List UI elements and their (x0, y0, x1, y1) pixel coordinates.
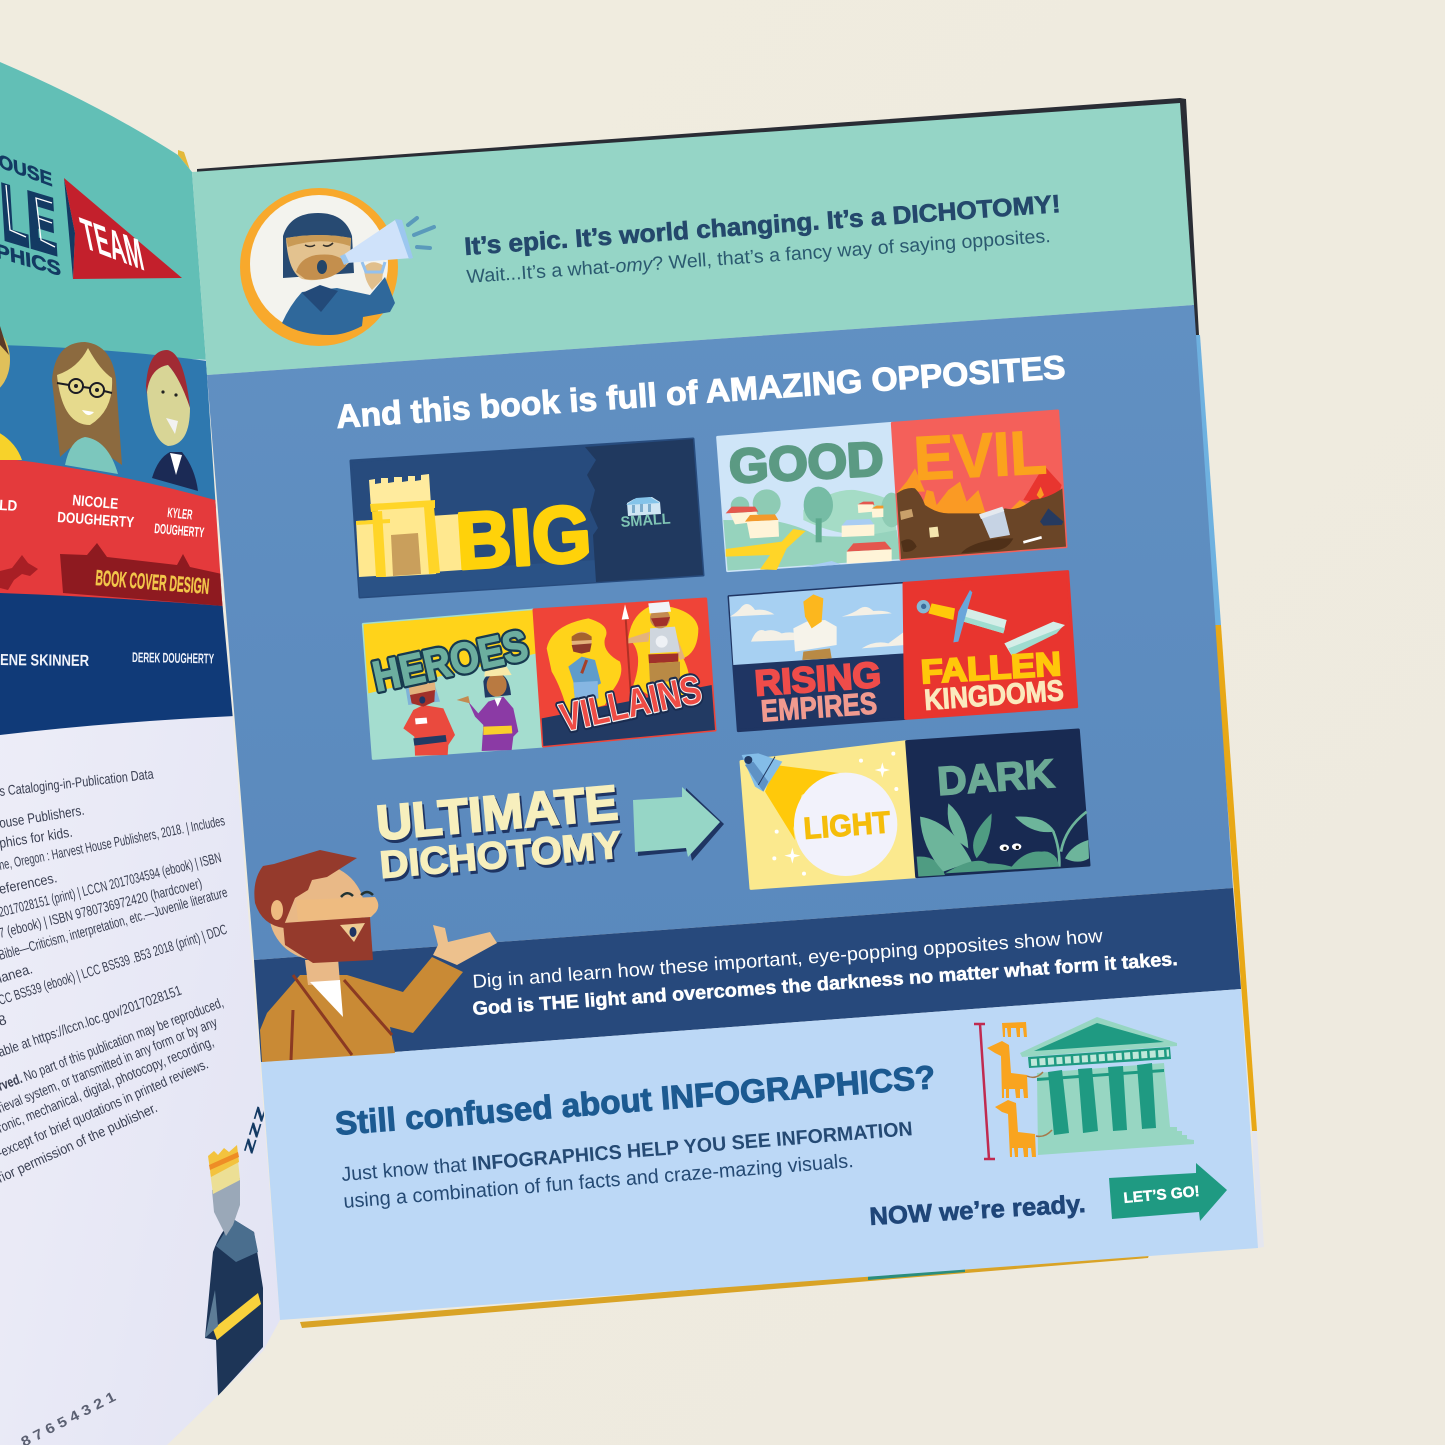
card: rising empires, fallen kingdoms (729, 572, 1077, 731)
text block: cataloging data: -except for brief quotations in printed reviews. (0, 1056, 210, 1161)
text block: cataloging data: 2017028151 (print) | LCCN 2017034594 (ebook) | ISBN (0, 849, 223, 920)
text block: cataloging data: able at https://lccn.loc.gov/2017028151 (0, 982, 184, 1060)
card: heroes and villains: VILLAINS (556, 667, 705, 740)
heading: dichotomy intro: Wait...It’s a what-omy? Well, that’s a fancy way of saying opposites. (466, 226, 1051, 288)
callout: ultimate dichotomy: ULTIMATE (376, 779, 622, 854)
dark text band (254, 888, 1241, 1062)
text block: cataloging data: rved. No part of this publication may be reproduced, (0, 994, 226, 1094)
text block: cataloging data: ne, Oregon : Harvest House Publishers, 2018. | Includes (0, 812, 226, 873)
heading: dichotomy intro: It’s epic. It’s world changing. It’s a DICHOTOMY! (463, 190, 1061, 261)
banner: book cover design (60, 543, 224, 606)
card: rising empires, fallen kingdoms: RISING (753, 654, 882, 704)
heading: dichotomy intro (463, 190, 1061, 288)
label: names on navy band: DEREK DOUGHERTY (132, 649, 215, 666)
good landscape (723, 487, 902, 571)
left page navy band (0, 593, 235, 735)
arrow button: let's go (1109, 1163, 1227, 1221)
card: light and dark: DARK (936, 752, 1056, 804)
leaves (917, 803, 1089, 877)
logo text fragment: LE (0, 167, 59, 271)
left page (0, 62, 280, 1445)
evil flames and rubble (897, 467, 1066, 559)
pennant: team: TEAM (76, 207, 148, 281)
card: good and evil: GOOD (728, 433, 885, 494)
callout: ultimate dichotomy: DICHOTOMY (378, 824, 623, 887)
broken sword (917, 590, 1065, 656)
giraffes (987, 1022, 1052, 1157)
callout: ultimate dichotomy: ULTIMATE (374, 776, 620, 851)
figure: sleeping king: zzz (238, 1103, 270, 1156)
right page (192, 103, 1258, 1320)
temple (1020, 1017, 1194, 1155)
text block: infographics explanation: using a combination of fun facts and craze-mazing visuals. (343, 1150, 854, 1213)
portrait: Nicole (52, 342, 122, 474)
card: heroes and villains: HEROES (369, 621, 532, 701)
header band (192, 103, 1194, 375)
label: names on red band: KYLER (167, 504, 193, 523)
arrow button: let's go: LET’S GO! (1123, 1183, 1200, 1207)
callout: ultimate dichotomy: DICHOTOMY (380, 827, 625, 890)
text block: dark band message: Dig in and learn how these important, eye-popping opposites show how (472, 926, 1104, 993)
text block: cataloging data (0, 766, 229, 1186)
text block: cataloging data: 7 (ebook) | ISBN 9780736972420 (hardcover) (0, 875, 204, 941)
card: light and dark: LIGHT (802, 805, 892, 846)
callout: ultimate dichotomy (374, 776, 625, 890)
icon: small house (626, 497, 661, 516)
sparkles (772, 752, 898, 876)
card: rising empires, fallen kingdoms: FALLEN (920, 646, 1062, 691)
heading: amazing opposites: And this book is full of AMAZING OPPOSITES (335, 348, 1066, 435)
banner: book cover design: BOOK COVER DESIGN (95, 565, 210, 599)
text block: cataloging data: s Cataloging-in-Publication Data (0, 766, 155, 799)
card: good and evil (718, 411, 1066, 571)
clouds (730, 604, 905, 648)
card: good and evil: EVIL (912, 418, 1048, 494)
label: names on red band: NICOLE (72, 492, 119, 513)
lamp (742, 753, 782, 792)
card: rising empires, fallen kingdoms: KINGDOMS (923, 674, 1065, 717)
label: names on navy band (0, 652, 214, 666)
text block: cataloging data: ronic, mechanical, digital, photocopy, recording, (0, 1033, 216, 1136)
figure: bearded narrator (254, 850, 497, 1062)
portrait: Kyler (146, 350, 198, 491)
text block: cataloging data: phics for kids. (0, 824, 74, 851)
card: big and small (351, 439, 703, 597)
emperor figure (793, 594, 837, 660)
text block: dark band message: God is THE light and overcomes the darkness no matter what form it takes. (472, 949, 1178, 1020)
card: light and dark (741, 730, 1089, 888)
card: heroes and villains (363, 599, 715, 758)
figure: sleeping king (205, 1106, 264, 1396)
portrait: left person fragment (0, 326, 22, 460)
card: heroes and villains: HEROES (369, 621, 532, 701)
text block: cataloging data: rior permission of the publisher. (0, 1099, 160, 1186)
icon: giraffes versus temple (974, 1017, 1194, 1159)
eyes in the dark (1000, 843, 1021, 851)
card: big and small: SMALL (620, 511, 671, 531)
text: now we're ready: NOW we’re ready. (869, 1190, 1086, 1231)
text block: cataloging data: ouse Publishers. (0, 802, 85, 831)
mid blue band (207, 305, 1233, 960)
icon: yellow temple (356, 474, 462, 577)
pennant: team (64, 178, 182, 281)
card: big and small: BIG (453, 488, 594, 586)
text block: cataloging data: CC BS539 (ebook) | LCC BS539 .B53 2018 (print) | DDC (0, 921, 229, 1008)
villain figures (547, 602, 698, 715)
card: rising empires, fallen kingdoms: EMPIRES (760, 686, 878, 729)
height bar (974, 1024, 995, 1159)
icon: man with megaphone in orange ring (240, 188, 434, 346)
heading: still confused: Still confused about INFOGRAPHICS? (334, 1058, 937, 1142)
left page blue band (0, 345, 225, 510)
left page teal band (0, 60, 210, 360)
arrow to ultimate dichotomy (633, 787, 724, 861)
left page red band (0, 458, 228, 610)
text block: infographics explanation: Just know that INFOGRAPHICS HELP YOU SEE INFORMATION (341, 1118, 913, 1186)
label: names on red band: DOUGHERTY (154, 520, 205, 540)
label: names on navy band: ENE SKINNER (0, 652, 89, 670)
text block: cataloging data: Bible—Criticism, interpretation, etc.—Juvenile literature (0, 884, 229, 963)
logo text fragment (0, 156, 60, 275)
text block: cataloging data: rieval system, or transmitted in any form or by any (0, 1014, 219, 1116)
card: heroes and villains: VILLAINS (556, 667, 705, 740)
icon: running horse (0, 555, 38, 590)
hero figures (403, 667, 518, 756)
light bottom panel (261, 989, 1258, 1320)
hardcover edges behind the right page (178, 98, 1264, 1328)
label: names on red band (0, 494, 204, 538)
label: names on red band: DOUGHERTY (57, 509, 135, 531)
spotlight beam (765, 765, 842, 840)
